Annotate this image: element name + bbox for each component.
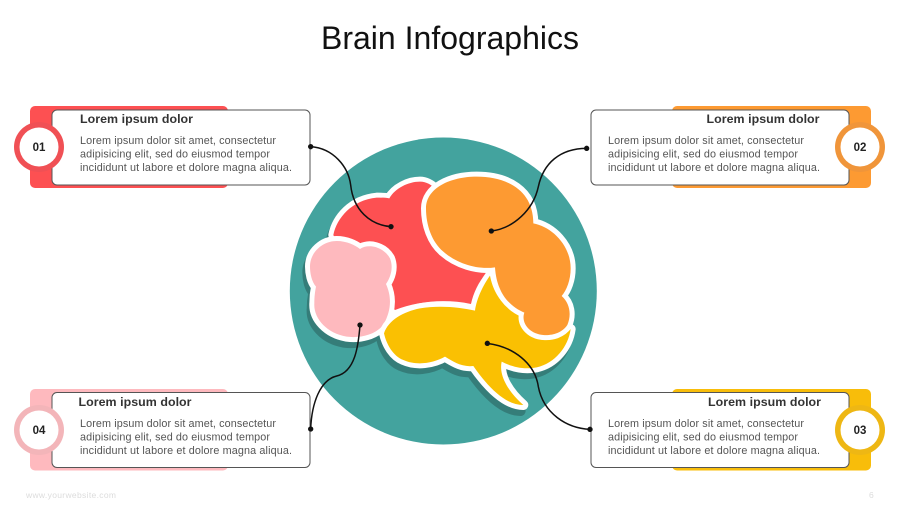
badge 03	[835, 405, 885, 455]
card 01 body text: incididunt ut labore et dolore magna aliqua.	[80, 162, 292, 174]
card 02	[591, 106, 885, 188]
card 03 body text: incididunt ut labore et dolore magna aliqua.	[608, 445, 820, 457]
card 04 body text: incididunt ut labore et dolore magna aliqua.	[80, 445, 292, 457]
card 01	[14, 106, 310, 188]
connector 01	[308, 144, 394, 229]
region: pink lobe	[310, 241, 392, 337]
card 04 box	[52, 392, 310, 468]
card 03 colour backing	[672, 389, 871, 470]
badge 03: 03	[854, 425, 866, 437]
card 03 box	[591, 392, 849, 468]
badge 02: 02	[854, 142, 866, 154]
page number: 6	[869, 490, 874, 500]
region: orange lobe	[426, 177, 571, 335]
card 03 body text: Lorem ipsum dolor sit amet, consectetur	[608, 418, 804, 430]
card 04 colour backing	[30, 389, 228, 470]
card 01 colour backing	[30, 106, 228, 188]
card 02 body text: incididunt ut labore et dolore magna aliqua.	[608, 162, 820, 174]
card 02 heading: Lorem ipsum dolor	[706, 112, 820, 126]
card 03 body text: adipisicing elit, sed do eiusmod tempor	[608, 432, 798, 444]
card 03 heading: Lorem ipsum dolor	[708, 395, 821, 409]
card 04 body text: adipisicing elit, sed do eiusmod tempor	[80, 432, 270, 444]
card 02 box	[591, 110, 849, 185]
card 01 heading: Lorem ipsum dolor	[80, 112, 193, 126]
brain illustration	[307, 177, 571, 411]
card 02 body text: adipisicing elit, sed do eiusmod tempor	[608, 149, 798, 161]
region: red lobe	[333, 182, 487, 310]
card 03 body text	[608, 418, 820, 457]
footer website: www.yourwebsite.com	[25, 490, 116, 500]
card 01 body text	[80, 135, 292, 174]
card 01 body text: adipisicing elit, sed do eiusmod tempor	[80, 149, 270, 161]
connector 03	[485, 341, 593, 432]
connector 02	[489, 146, 589, 234]
card 02 colour backing	[672, 106, 871, 188]
title: Brain Infographics	[321, 20, 579, 56]
badge 01	[14, 122, 64, 172]
badge 04	[14, 405, 64, 455]
card 01 body text: Lorem ipsum dolor sit amet, consectetur	[80, 135, 276, 147]
card 04 body text	[80, 418, 292, 457]
brain shadow	[307, 183, 568, 411]
card 04 body text: Lorem ipsum dolor sit amet, consectetur	[80, 418, 276, 430]
card 04	[14, 389, 310, 470]
connector 04	[308, 322, 363, 432]
badge 01: 01	[33, 142, 46, 154]
region: yellow lobe	[384, 276, 571, 405]
card 01 box	[52, 110, 310, 185]
connector lines	[308, 144, 593, 432]
teal circle background	[290, 138, 597, 444]
card 04 heading: Lorem ipsum dolor	[78, 395, 192, 409]
card 02 body text: Lorem ipsum dolor sit amet, consectetur	[608, 135, 804, 147]
badge 02	[835, 122, 885, 172]
card 03	[591, 389, 885, 470]
badge 04: 04	[33, 425, 46, 437]
card 02 body text	[608, 135, 820, 174]
